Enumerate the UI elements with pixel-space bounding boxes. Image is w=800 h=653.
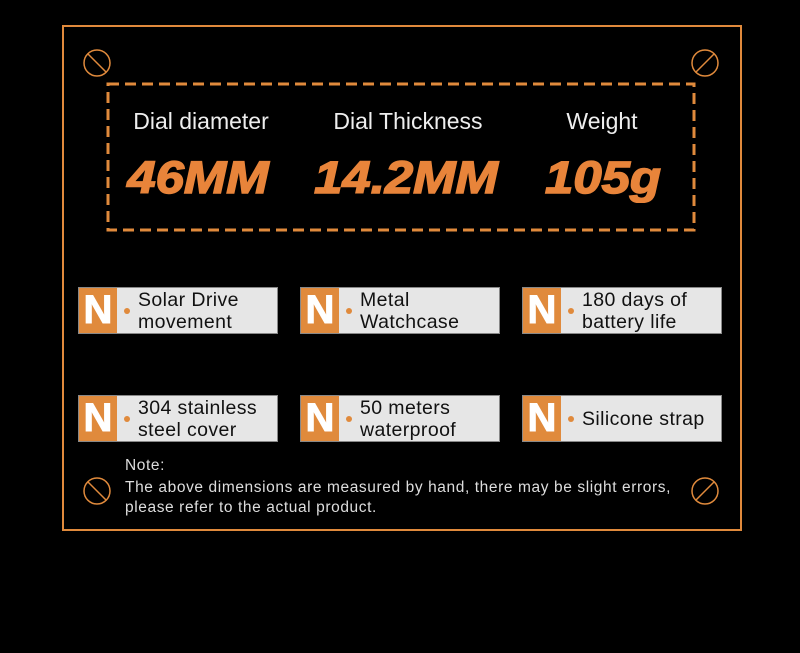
text: 46MM bbox=[127, 152, 269, 203]
card: waterproof: N bbox=[306, 396, 334, 440]
card: stainless: N bbox=[84, 396, 112, 440]
icon: screw bottom-right bbox=[692, 478, 718, 504]
spec: dial thickness bbox=[314, 108, 500, 203]
card: battery: 180 days of bbox=[582, 289, 687, 311]
card: battery: N bbox=[528, 288, 556, 332]
card: metal watchcase: Metal bbox=[360, 289, 410, 311]
note text: The above dimensions are measured by hand, there may be slight errors, bbox=[125, 479, 671, 496]
card: silicone: Silicone strap bbox=[582, 408, 705, 430]
text: Dial Thickness bbox=[333, 108, 483, 134]
spec: weight bbox=[544, 108, 662, 203]
card: waterproof bbox=[300, 395, 500, 442]
card: solar drive: Solar Drive bbox=[138, 289, 239, 311]
card: waterproof: waterproof bbox=[360, 419, 456, 441]
card: solar drive bbox=[78, 287, 278, 334]
icon: screw bottom-left bbox=[84, 478, 110, 504]
card: metal watchcase: Watchcase bbox=[360, 311, 459, 333]
card: solar drive: N bbox=[84, 288, 112, 332]
note text bbox=[125, 457, 671, 516]
card: solar drive: movement bbox=[138, 311, 232, 333]
card: battery: battery life bbox=[582, 311, 677, 333]
icon: screw top-right bbox=[692, 50, 718, 76]
text: Weight bbox=[566, 108, 638, 134]
note text: please refer to the actual product. bbox=[125, 499, 377, 516]
card: waterproof: 50 meters bbox=[360, 397, 450, 419]
text: 14.2MM bbox=[314, 152, 498, 203]
dashed spec box bbox=[108, 84, 694, 230]
card: metal watchcase bbox=[300, 287, 500, 334]
spec: dial diameter bbox=[126, 108, 270, 203]
card: stainless bbox=[78, 395, 278, 442]
text: 105g bbox=[545, 152, 661, 203]
card: battery bbox=[522, 287, 722, 334]
outer frame bbox=[62, 25, 742, 531]
card: stainless: 304 stainless bbox=[138, 397, 257, 419]
note text: Note: bbox=[125, 457, 165, 474]
card: stainless: steel cover bbox=[138, 419, 237, 441]
card: silicone: N bbox=[528, 396, 556, 440]
card: metal watchcase: N bbox=[306, 288, 334, 332]
card: silicone bbox=[522, 395, 722, 442]
icon: screw top-left bbox=[84, 50, 110, 76]
text: Dial diameter bbox=[133, 108, 269, 134]
